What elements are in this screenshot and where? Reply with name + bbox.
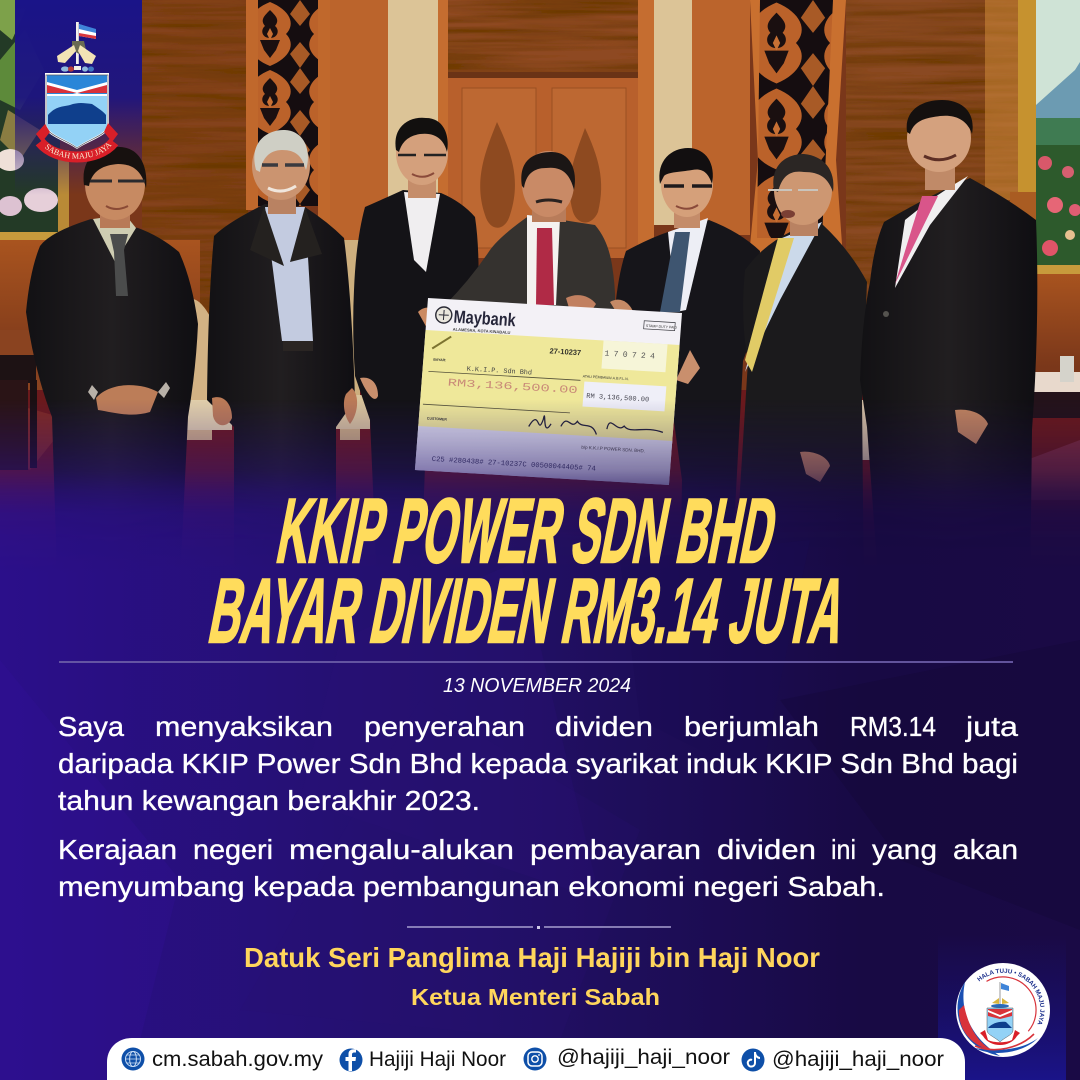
Maybank mock cheque: BAYAR: (433, 358, 446, 362)
body text: dividen (555, 711, 653, 742)
signatory name and title: Datuk Seri Panglima Haji Hajiji bin Haji Noor (244, 942, 820, 973)
body text: Kerajaan (58, 834, 177, 865)
body text: dividen (717, 834, 816, 865)
Maybank mock cheque: Maybank (453, 307, 517, 330)
person 4 (418, 151, 615, 330)
body text: daripada KKIP Power Sdn Bhd kepada syarikat induk KKIP Sdn Bhd bagi (58, 748, 1018, 779)
side furniture and sofas (0, 240, 1080, 482)
body text: menyaksikan (155, 711, 333, 742)
body text: berjumlah (684, 711, 819, 742)
Maybank mock cheque: RM 3,136,500.00 (586, 393, 649, 404)
body text: pembayaran (530, 834, 701, 865)
body text: menyumbang kepada pembangunan ekonomi negeri Sabah. (58, 871, 885, 902)
website item: cm.sabah.gov.my (152, 1048, 324, 1071)
body text: Saya (58, 711, 125, 742)
signatory name and title: Ketua Menteri Sabah (411, 984, 660, 1010)
tiktok item: @hajiji_haji_noor (772, 1048, 944, 1071)
left floral painting (0, 0, 69, 240)
person 7 (860, 100, 1037, 603)
Maybank mock cheque: STAMP DUTY PAID (646, 324, 677, 330)
person 3 (353, 118, 479, 603)
body text: RM3.14 (850, 711, 936, 742)
body text: mengalu-alukan (289, 834, 514, 865)
body text: ini (831, 834, 856, 865)
Maybank mock cheque: K.K.I.P. Sdn Bhd (466, 366, 532, 377)
Sabah state crest: SABAH MAJU JAYA (45, 143, 112, 159)
Maybank mock cheque: RM3,136,500.00 (447, 378, 578, 397)
Maybank mock cheque: 27-10237 (549, 346, 582, 357)
facebook item: Hajiji Haji Noor (369, 1048, 506, 1071)
person 6 (733, 154, 867, 603)
right landscape painting (1036, 0, 1080, 274)
blue panel behind campaign logo (938, 935, 1066, 1080)
Maybank mock cheque: C25 #280438# 27-10237C 00500044405# 74 (431, 456, 596, 474)
person 2 (207, 130, 357, 603)
body text: tahun kewangan berakhir 2023. (58, 785, 480, 816)
Maybank mock cheque: ALAMESRA, KOTA KINABALU (453, 327, 511, 335)
purple fade background with polygon facets (0, 405, 1080, 1080)
body text: akan (953, 834, 1018, 865)
Maybank mock cheque (415, 298, 682, 485)
campaign logo: Hala Tuju Sabah Maju Jaya: HALA TUJU • SABAH MAJU JAYA (976, 968, 1044, 1024)
date: 13 NOVEMBER 2024 (443, 675, 631, 697)
body text: penyerahan (364, 711, 525, 742)
Maybank mock cheque: ATAU PEMBAWA/ A.B.F.L.N. (583, 374, 629, 381)
person 5 (610, 148, 760, 603)
Maybank mock cheque: 170724 (604, 350, 659, 362)
blue crest band at top left (15, 0, 142, 195)
body text: juta (965, 711, 1019, 742)
person 1 (26, 147, 198, 603)
body text: yang (872, 834, 937, 865)
Maybank mock cheque: b/p K.K.I.P POWER SDN. BHD. (581, 445, 645, 453)
Maybank mock cheque: CUSTOMER (427, 416, 447, 422)
body text: negeri (193, 834, 273, 865)
instagram item: @hajiji_haji_noor (557, 1046, 730, 1069)
